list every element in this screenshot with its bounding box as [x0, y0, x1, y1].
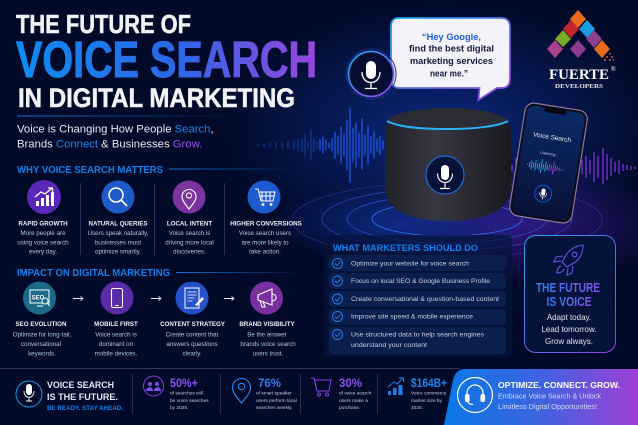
- panel: natural queries: businesses must: [95, 240, 141, 246]
- stat: 30%: purchase.: [339, 405, 360, 411]
- panel: seo evolution: keywords.: [28, 350, 56, 358]
- panel: local intent: LOCAL INTENT: [167, 220, 212, 228]
- stat: 50%+: [144, 376, 209, 411]
- stat: $164B+: [388, 376, 447, 411]
- stat: 30%: users make a: [339, 398, 368, 404]
- checklist: Optimize your website for voice search: [351, 260, 469, 268]
- stat: 76%: of smart speaker: [256, 390, 292, 396]
- panel: seo evolution: SEO EVOLUTION: [16, 321, 67, 328]
- panel: content strategy: CONTENT STRATEGY: [160, 321, 226, 328]
- panel: higher conversions: HIGHER CONVERSIONS: [230, 220, 302, 228]
- logo wordmark: FUERTE: [549, 67, 609, 83]
- panel: the future is voice: IS VOICE: [546, 295, 592, 309]
- speech bubble: marketing services: [410, 56, 493, 66]
- panel: rapid growth: RAPID GROWTH: [18, 220, 68, 228]
- panel: local intent: driving more local: [165, 240, 214, 246]
- panel: brand visibility: [239, 282, 296, 358]
- icon: growth chart: [27, 180, 61, 214]
- subtitle: Voice is Changing How People Search,: [17, 124, 214, 136]
- cta banner: [444, 369, 638, 425]
- stat: $164B+: 2025.: [411, 405, 423, 411]
- panel: natural queries: Users speak naturally,: [88, 230, 149, 237]
- panel: mobile first: MOBILE FIRST: [94, 321, 138, 328]
- panel: seo evolution: Optimize for long-tail,: [13, 332, 72, 338]
- banner tagline: IS THE FUTURE.: [47, 392, 118, 402]
- checklist: [329, 255, 506, 354]
- panel: higher conversions: are more likely to: [241, 240, 289, 246]
- panel: higher conversions: take action.: [249, 248, 281, 256]
- icon: smartphone: [100, 282, 134, 314]
- panel: rapid growth: using voice search: [17, 240, 69, 246]
- stat: 50%+: of searches will: [170, 390, 203, 396]
- panel: natural queries: [88, 180, 149, 256]
- checklist: Improve site speed & mobile experience: [351, 314, 473, 320]
- banner tagline: VOICE SEARCH: [47, 380, 114, 390]
- panel: what marketers should do: [324, 235, 512, 357]
- title: VOICE SEARCH: [16, 31, 317, 88]
- cta banner: Embrace Voice Search & Unlock: [498, 394, 601, 400]
- arrow: [151, 296, 161, 300]
- panel: brand visibility: Be the answer: [247, 332, 287, 338]
- arrow: [73, 296, 83, 300]
- panel: content strategy: answers questions: [166, 341, 218, 348]
- panel: brand visibility: BRAND VISIBILITY: [239, 321, 296, 328]
- stat: 76%: 76%: [258, 376, 281, 390]
- stat: 30%: of voice search: [339, 390, 372, 396]
- stat: 50%+: be voice searches: [170, 398, 209, 404]
- icon: mic ring: [16, 381, 42, 407]
- panel: the future is voice: Adapt today.: [547, 313, 591, 322]
- logo subtitle: DEVELOPERS: [555, 83, 603, 90]
- title: THE FUTURE OF: [16, 9, 191, 39]
- stat: 76%: searches weekly.: [256, 405, 292, 411]
- stat: $164B+: $164B+: [411, 376, 447, 390]
- icon: rising bar chart: [388, 378, 404, 395]
- stat: 50%+: 50%+: [170, 376, 198, 390]
- panel: the future is voice: Lead tomorrow.: [541, 325, 597, 334]
- sound wave right: [512, 148, 635, 184]
- icon: rocket: [554, 245, 583, 275]
- icon: people: [144, 376, 164, 396]
- icon: speaker mic: [426, 156, 464, 194]
- subtitle: Brands Connect & Businesses Grow.: [17, 138, 202, 150]
- panel: natural queries: NATURAL QUERIES: [89, 220, 147, 228]
- ripple rings: [292, 182, 602, 258]
- title: IN DIGITAL MARKETING: [18, 83, 295, 113]
- logo: Fuerte Developers: [547, 10, 616, 90]
- panel: seo evolution: conversational: [21, 341, 61, 348]
- smart speaker: [385, 108, 511, 221]
- speech bubble: find the best digital: [409, 44, 494, 54]
- checklist: understand your content: [351, 342, 427, 349]
- panel: natural queries: optimize smartly.: [95, 248, 141, 256]
- speech bubble: near me.”: [430, 68, 468, 78]
- panel: content strategy: Create content that: [166, 332, 219, 338]
- panel: mobile first: mobile devices.: [95, 350, 138, 358]
- banner tagline: BE READY. STAY AHEAD.: [47, 406, 123, 412]
- icon: map pin: [172, 180, 206, 214]
- speech bubble: “Hey Google,: [422, 32, 481, 42]
- title: [16, 9, 317, 113]
- panel: mobile first: [94, 282, 138, 358]
- panel: local intent: Voice search is: [169, 230, 210, 237]
- panel: the future is voice: Grow always.: [545, 337, 593, 346]
- icon: microphone badge: [346, 49, 396, 99]
- icon: headset: [458, 378, 492, 412]
- panel: mobile first: dominant on: [99, 341, 134, 348]
- panel: seo evolution: [13, 282, 72, 358]
- panel: the future is voice: [524, 236, 616, 352]
- checklist: Use structured data to help search engines: [351, 332, 485, 338]
- stat: $164B+: Voice commerce: [411, 390, 447, 396]
- icon: seo monitor: SEO: [32, 296, 45, 302]
- panel: higher conversions: [230, 180, 302, 256]
- icon: magnifier: [102, 180, 134, 214]
- stat: 76%: users perform local: [256, 398, 297, 404]
- panel: local intent: discoveries.: [173, 248, 206, 256]
- panel: rapid growth: every day.: [29, 248, 57, 256]
- cta banner: OPTIMIZE. CONNECT. GROW.: [498, 380, 620, 390]
- panel: content strategy: [160, 282, 226, 358]
- speech bubble: [391, 18, 510, 100]
- icon: document with pen: [176, 282, 208, 314]
- section heading: impact on digital marketing: IMPACT ON DIGITAL MARKETING: [17, 267, 170, 279]
- panel: content strategy: clearly.: [182, 350, 202, 358]
- stat: 76%: [232, 376, 297, 411]
- sound wave left: [258, 108, 383, 182]
- icon: phone mic: [533, 184, 553, 203]
- section heading: why voice search matters: WHY VOICE SEARCH MATTERS: [17, 164, 163, 176]
- panel: brand visibility: brands voice search: [240, 341, 296, 348]
- panel: the future is voice: THE FUTURE: [536, 281, 600, 295]
- arrow: [224, 296, 234, 300]
- logo: Fuerte Developers: ®: [611, 66, 616, 73]
- icon: shopping cart: [248, 180, 280, 214]
- checklist: Focus on local SEO & Google Business Profile: [351, 278, 490, 285]
- stat: 30%: 30%: [339, 376, 362, 390]
- icon: cart: [311, 378, 331, 396]
- panel: higher conversions: Voice search users: [239, 230, 291, 237]
- panel: mobile first: Voice search is: [95, 332, 137, 338]
- phone: [508, 102, 589, 224]
- banner tagline: [16, 380, 123, 412]
- panel: rapid growth: More people are: [20, 230, 66, 237]
- panel heading: WHAT MARKETERS SHOULD DO: [333, 243, 478, 254]
- stat: 50%+: by 2025.: [170, 405, 188, 411]
- phone status: Listening...: [540, 151, 559, 158]
- panel: rapid growth: [17, 180, 69, 256]
- panel: brand visibility: users trust.: [253, 350, 284, 358]
- icon: location pin: [232, 378, 250, 403]
- stat: 30%: [311, 376, 372, 411]
- panel: local intent: [165, 180, 214, 256]
- checklist: Create conversational & question-based content: [351, 296, 499, 303]
- icon: megaphone: [250, 282, 283, 314]
- cta banner: Limitless Digital Opportunities!: [498, 404, 597, 411]
- stat: $164B+: market size by: [411, 398, 443, 404]
- phone title: Voice Search: [533, 131, 572, 144]
